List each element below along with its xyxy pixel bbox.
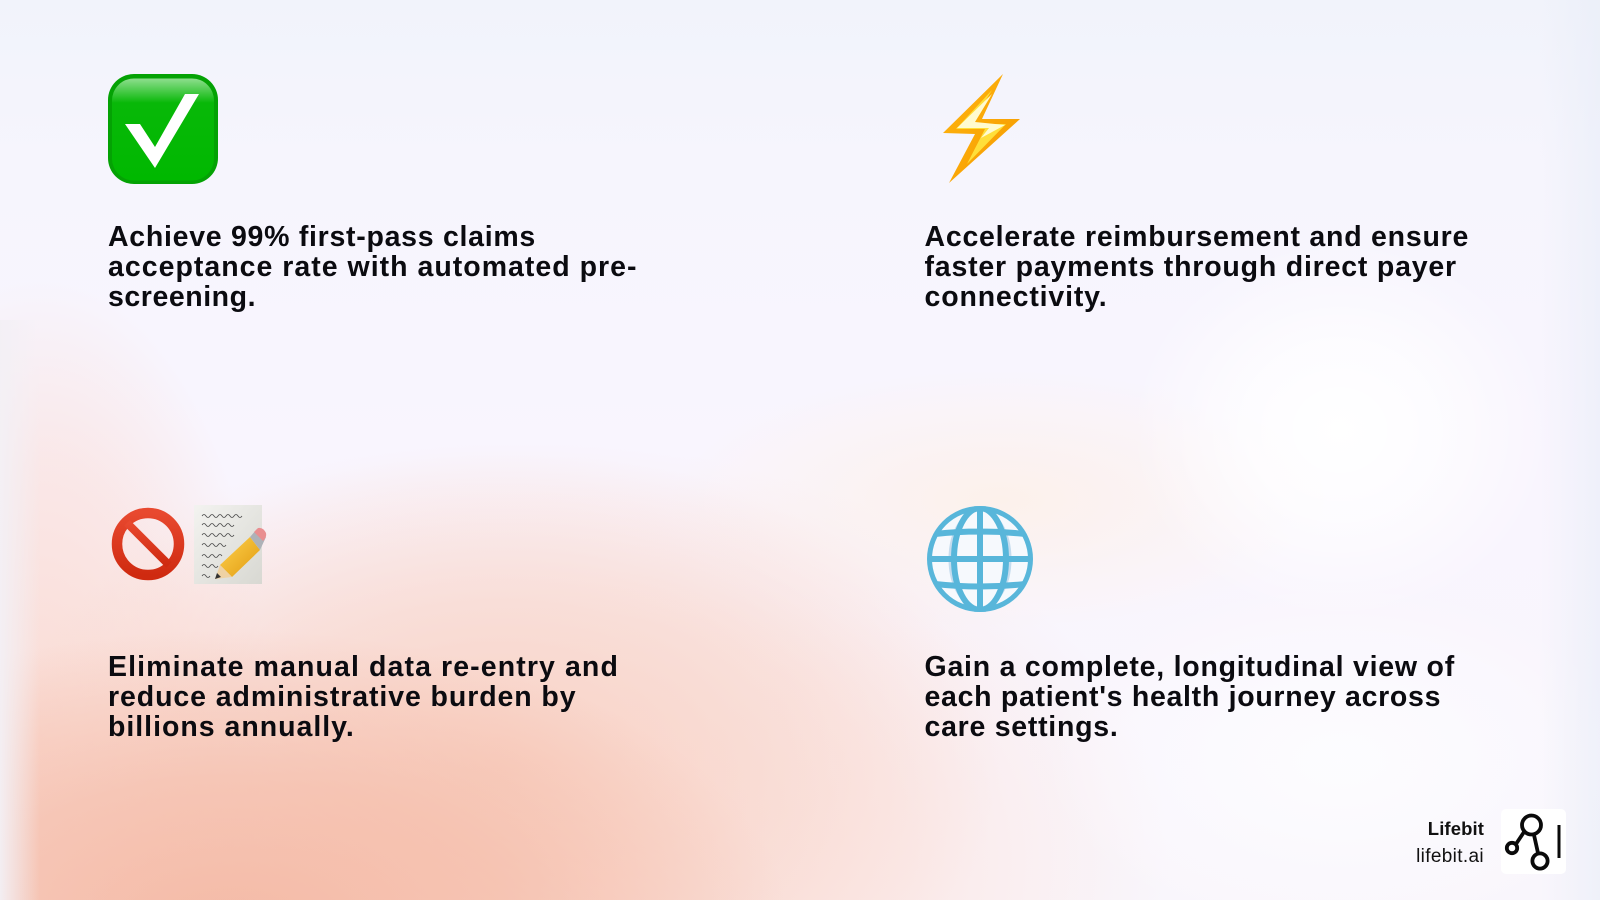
icons: prohibited sign and memo [112, 505, 266, 584]
text: reimbursement: connectivity. [924, 281, 1108, 313]
panel: claims acceptance [108, 74, 638, 313]
text: manual data entry [108, 651, 619, 743]
text: reimbursement: faster payments through direct payer [924, 251, 1457, 283]
text: manual data entry: Eliminate manual data re-entry and [108, 651, 619, 683]
text: reimbursement [924, 221, 1469, 313]
text: reimbursement: Accelerate reimbursement and ensure [924, 221, 1469, 253]
icon: green check mark [108, 74, 218, 184]
brand text: Lifebit: lifebit.ai [1416, 846, 1484, 867]
logo: Lifebit [1501, 809, 1566, 874]
text: longitudinal view [924, 651, 1455, 743]
text: manual data entry: reduce administrative burden by [108, 681, 576, 713]
text: claims acceptance: Achieve 99% first-pass claims [108, 221, 536, 253]
text: claims acceptance [108, 221, 638, 313]
text: manual data entry: billions annually. [108, 711, 355, 743]
panel: manual data entry [108, 505, 619, 743]
text: longitudinal view: each patient's health journey across [924, 681, 1441, 713]
icon: lightning bolt [943, 74, 1020, 183]
icon: globe with meridians [927, 506, 1033, 612]
brand text: Lifebit: Lifebit [1428, 818, 1484, 839]
icon: prohibited sign [117, 513, 179, 575]
panel: reimbursement [924, 74, 1469, 313]
icon: memo with pencil [194, 505, 266, 584]
brand text: Lifebit [1416, 818, 1484, 867]
text: longitudinal view: care settings. [924, 711, 1118, 743]
text: longitudinal view: Gain a complete, longitudinal view of [924, 651, 1455, 683]
text: claims acceptance: acceptance rate with automated pre- [108, 251, 638, 283]
panel: longitudinal view [924, 506, 1455, 743]
text: claims acceptance: screening. [108, 281, 256, 313]
